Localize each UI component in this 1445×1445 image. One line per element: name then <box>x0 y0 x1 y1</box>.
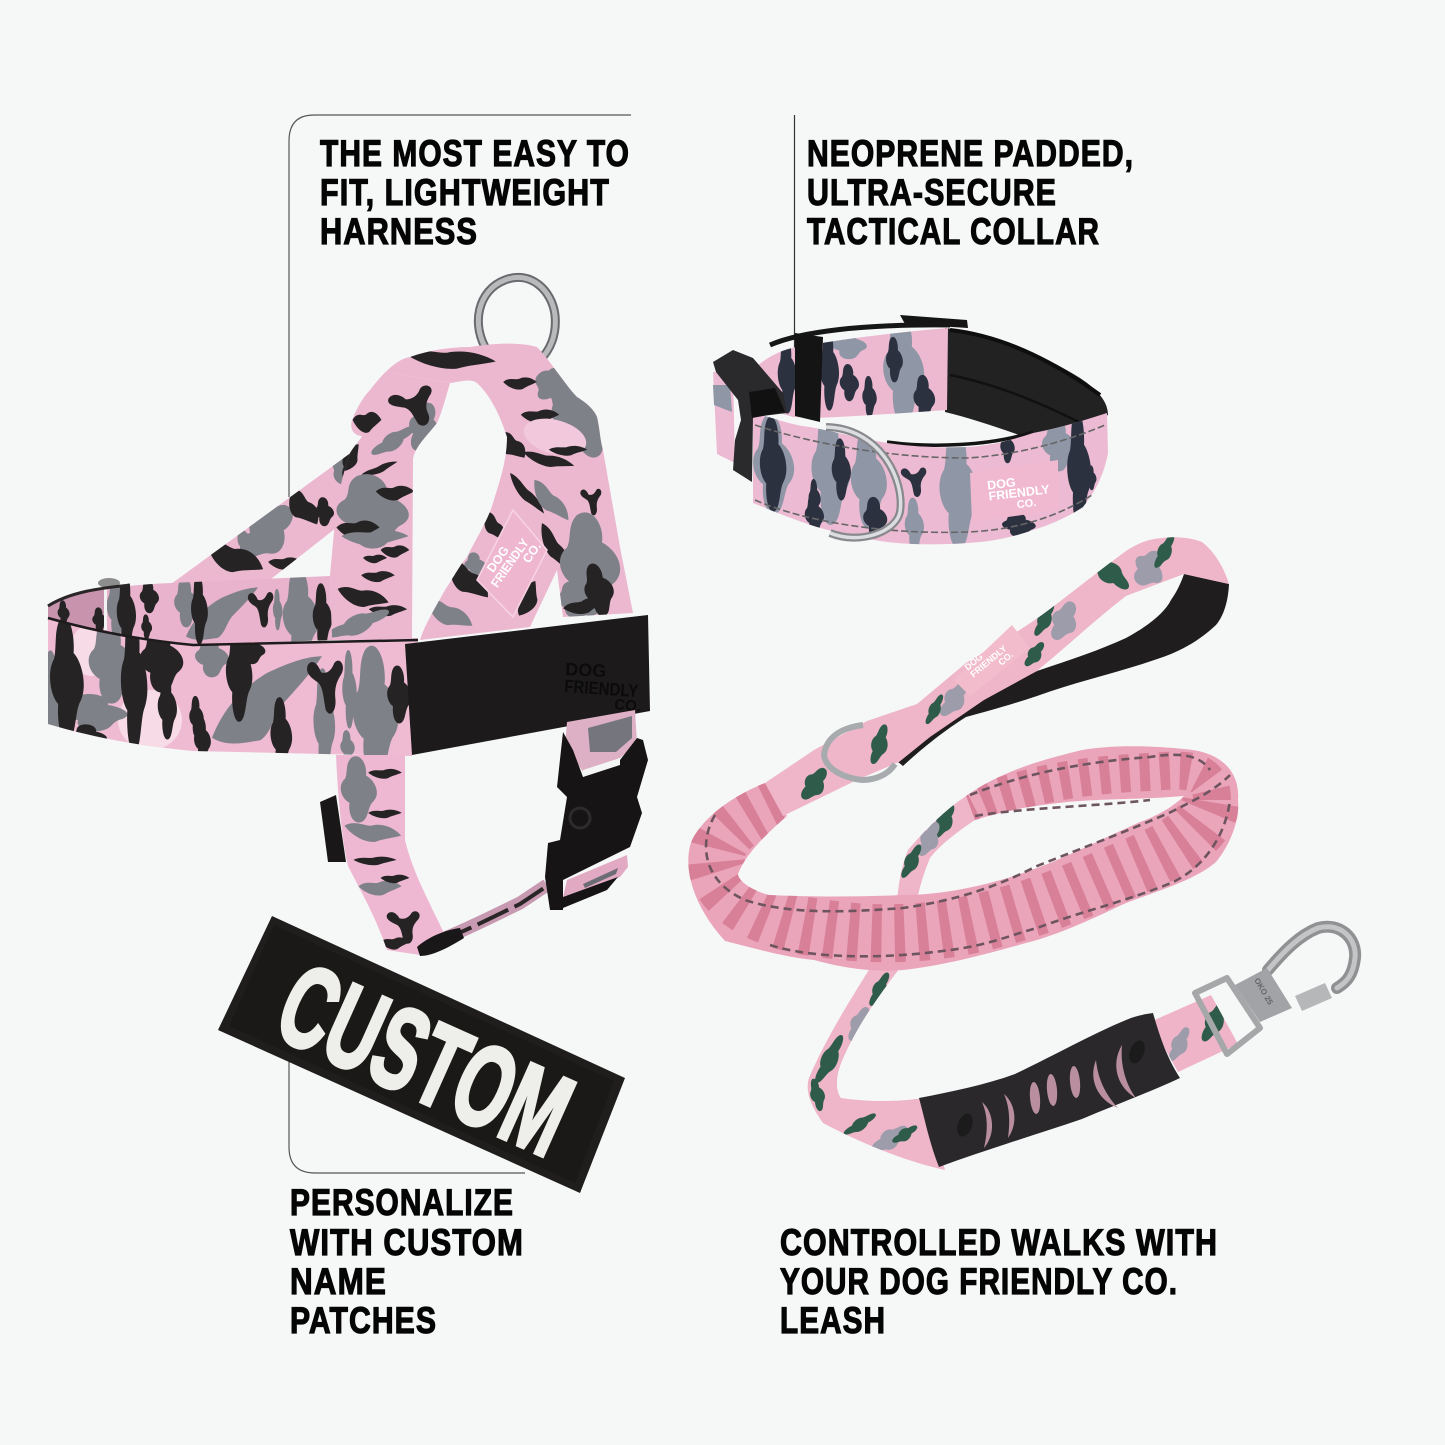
heading: collar: ULTRA-SECURE <box>807 172 1057 213</box>
leash webbing end <box>1155 995 1237 1072</box>
collar back padding <box>945 328 1108 440</box>
collar front rim <box>887 432 1033 445</box>
clasp link <box>1195 978 1260 1054</box>
harness back belt band <box>48 576 332 644</box>
heading: leash <box>780 1222 1218 1341</box>
harness strap tip <box>417 928 464 956</box>
leash handle label: CO. <box>996 650 1015 668</box>
leash handle label: FRIENDLY <box>968 643 1009 679</box>
heading: leash: CONTROLLED WALKS WITH <box>780 1222 1218 1263</box>
bungee stitching <box>706 755 1230 956</box>
harness woven label: DOG <box>484 544 512 575</box>
tactical collar <box>713 315 1110 551</box>
collar label: DOG <box>986 475 1016 493</box>
collar back webbing <box>758 328 948 418</box>
harness black patch <box>405 615 650 755</box>
harness front vertical strap <box>330 373 450 640</box>
rubber grip <box>919 1013 1180 1167</box>
leash handle label: DOG <box>963 652 985 672</box>
collar stitching <box>755 425 1105 532</box>
callout line: collar <box>794 115 796 372</box>
callout bracket: patch <box>289 1060 525 1173</box>
collar top clip <box>900 315 968 328</box>
heading: collar <box>807 133 1134 252</box>
harness strap below patch <box>565 710 637 772</box>
collar left end <box>713 372 735 463</box>
custom text: CUSTOM <box>260 938 590 1181</box>
harness woven label: FRIENDLY <box>488 536 532 590</box>
leash handle black padding <box>893 574 1229 766</box>
leash d-ring <box>824 725 895 780</box>
leash handle webbing <box>765 530 1235 820</box>
collar black buckle <box>713 350 787 482</box>
heading: harness <box>320 133 630 252</box>
harness black patch: DOG <box>565 659 607 681</box>
heading: collar: NEOPRENE PADDED, <box>807 133 1134 174</box>
leash tail webbing <box>808 796 975 1170</box>
collar black strap <box>795 333 823 422</box>
harness small buckle <box>98 578 120 588</box>
heading: patches: PERSONALIZE <box>290 1182 514 1223</box>
collar label: CO. <box>1016 497 1037 511</box>
leash handle label <box>954 625 1030 696</box>
heading: leash: YOUR DOG FRIENDLY CO. <box>780 1261 1178 1302</box>
collar d-ring <box>826 427 901 538</box>
harness black patch: FRIENDLY <box>564 676 639 701</box>
heading: leash: LEASH <box>780 1300 886 1341</box>
harness lower strap loop <box>440 885 547 940</box>
harness left slider <box>320 795 346 862</box>
heading: patches: WITH CUSTOM <box>290 1222 524 1263</box>
bungee leash <box>680 530 1355 1175</box>
harness bottom right strap <box>563 855 628 897</box>
heading: harness: HARNESS <box>320 211 478 252</box>
harness woven label: CO. <box>520 540 544 566</box>
heading: harness: THE MOST EASY TO <box>320 133 630 174</box>
heading: harness: FIT, LIGHTWEIGHT <box>320 172 610 213</box>
harness top arch, inner and far straps <box>365 335 640 645</box>
heading: collar: TACTICAL COLLAR <box>807 211 1100 252</box>
heading: patches <box>290 1182 524 1341</box>
harness d-ring <box>478 277 555 360</box>
callout bracket: harness <box>289 115 631 497</box>
bungee elastic body <box>680 740 1250 980</box>
harness belt top edge <box>48 618 418 645</box>
harness lower vertical strap <box>336 755 444 955</box>
harness <box>41 277 650 960</box>
custom name patch <box>218 916 625 1193</box>
heading: patches: NAME <box>290 1261 387 1302</box>
harness black buckle <box>545 732 648 910</box>
swivel clasp: OKO 25 <box>1252 976 1275 1007</box>
swivel clasp <box>1235 927 1355 1022</box>
heading: patches: PATCHES <box>290 1300 437 1341</box>
harness woven label <box>477 510 547 617</box>
collar top rim <box>770 325 950 345</box>
collar front band <box>750 410 1110 551</box>
harness front belt band <box>48 619 418 756</box>
collar label: FRIENDLY <box>988 482 1051 504</box>
harness black patch: CO. <box>614 696 642 715</box>
harness diagonal strap <box>172 454 350 583</box>
collar label <box>970 460 1058 522</box>
